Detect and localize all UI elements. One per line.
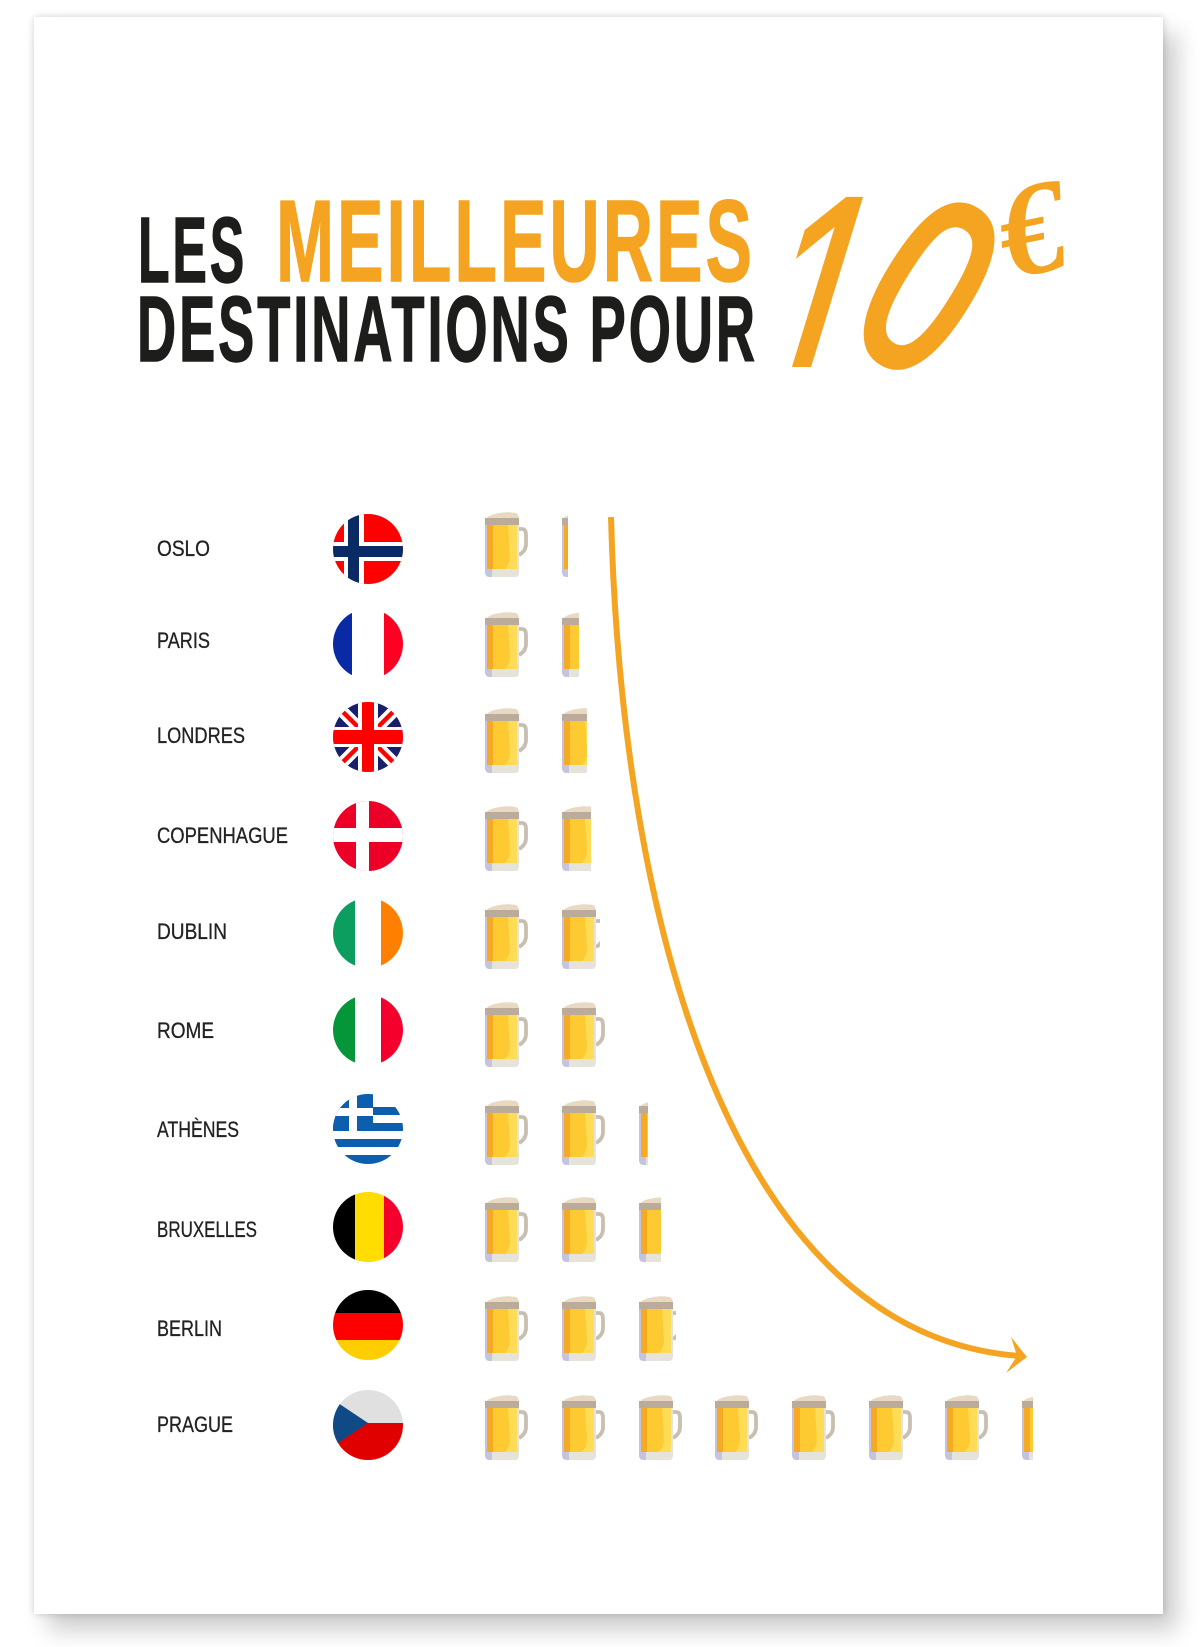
flag: Italy [333,995,403,1065]
flag: Denmark [333,801,403,871]
label: PARIS [157,628,210,653]
beer mugs [485,1395,1063,1460]
title amount: 0: 0 [814,142,1044,430]
title [140,181,1064,370]
beer mugs [485,1197,680,1262]
label: OSLO [157,536,210,561]
row: Berlin [157,1290,680,1361]
arrow: descending curve [611,517,1027,1373]
title amount: 1: 1 [718,137,920,459]
label: PRAGUE [157,1412,233,1437]
row: Bruxelles [157,1192,680,1262]
title word: MEILLEURES: MEILLEURES [276,176,755,306]
row: Dublin [157,898,603,969]
beer mugs [485,512,603,577]
beer mugs [485,1100,680,1165]
row: Prague [157,1390,1063,1461]
beer mugs [485,708,603,773]
row: Paris [158,612,579,677]
label: LONDRES [157,723,245,748]
flag: Greece [333,1094,403,1164]
row: Oslo [157,512,603,584]
infographic canvas [140,181,1064,1460]
beer mugs [485,1296,680,1361]
beer mugs [485,612,603,677]
flag: Belgium [333,1192,404,1262]
flag: United Kingdom [333,702,403,772]
flag: Germany [333,1290,403,1361]
title line: LES: LES [138,198,247,302]
title line: DESTINATIONS POUR: DESTINATIONS POUR [137,277,758,381]
title currency: euro: € [984,149,1084,308]
flag: Czech Republic [329,1390,403,1461]
beer mugs [485,1002,603,1067]
flag: Norway [333,514,403,584]
label: COPENHAGUE [157,823,288,848]
beer mugs [485,806,603,871]
label: ROME [157,1018,214,1043]
label: BRUXELLES [157,1217,257,1242]
label: ATHÈNES [157,1117,239,1142]
label: BERLIN [157,1316,222,1341]
row: Athènes [157,1094,680,1165]
label: DUBLIN [157,919,227,944]
flag: France [333,612,403,676]
row: Copenhague [157,801,603,871]
flag: Ireland [333,898,403,968]
row: Londres [157,702,603,773]
row: Rome [157,995,603,1067]
beer mugs [485,904,603,969]
